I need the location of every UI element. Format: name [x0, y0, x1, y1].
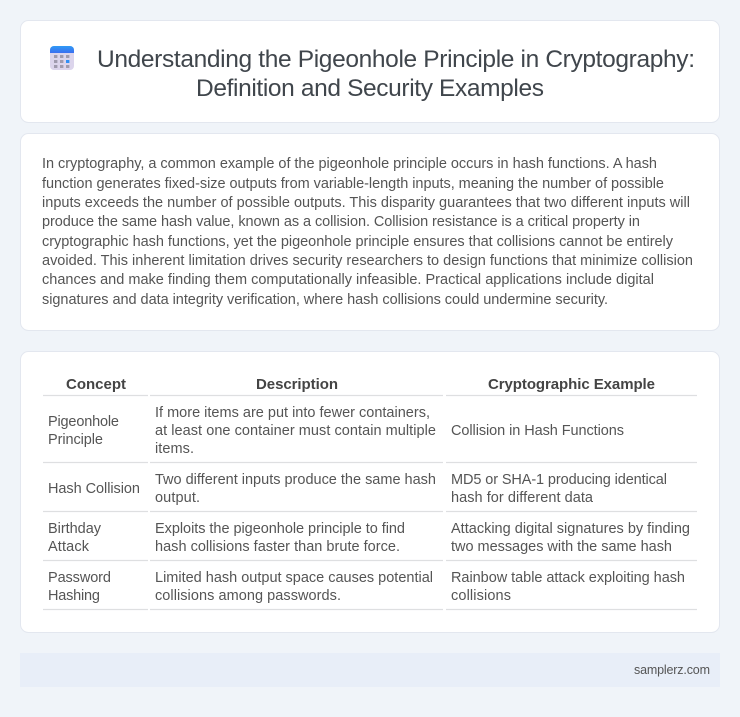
table header row: Cryptographic Example — [488, 376, 655, 393]
table row: hash collision: hash for different data — [451, 490, 594, 506]
panel: introduction — [20, 134, 720, 330]
panel: title header — [20, 20, 720, 122]
table row: pigeonhole principle — [48, 405, 624, 457]
table row: birthday attack: hash collisions faster than brute force. — [155, 539, 400, 555]
text block: introduction paragraph: produce the same hash value, known as a collision. Collision resistance is a critical property in — [42, 214, 640, 230]
table row: password hashing: collisions among passwords. — [155, 588, 341, 604]
heading — [97, 46, 695, 102]
footer: samplerz.com — [634, 663, 710, 677]
text block: introduction paragraph: In cryptography, a common example of the pigeonhole principle occurs in hash functions. A hash — [42, 156, 657, 172]
heading: Understanding the Pigeonhole Principle in Cryptography: — [97, 46, 695, 73]
table row: pigeonhole principle: Collision in Hash Functions — [451, 423, 624, 439]
heading: Definition and Security Examples — [196, 75, 544, 102]
table row: password hashing: Rainbow table attack exploiting hash — [451, 570, 685, 586]
table row: password hashing: collisions — [451, 588, 511, 604]
table row: pigeonhole principle: Pigeonhole — [48, 414, 119, 430]
text block: introduction paragraph: inputs exceeds the number of possible outputs. This disparity guarantees that two different inputs will — [42, 195, 690, 211]
table row: pigeonhole principle: items. — [155, 441, 194, 457]
table header row — [66, 376, 655, 393]
table row: hash collision: Hash Collision — [48, 481, 140, 497]
table row: password hashing: Password — [48, 570, 111, 586]
table row: hash collision: MD5 or SHA-1 producing identical — [451, 472, 667, 488]
table row: password hashing: Hashing — [48, 588, 100, 604]
text block: introduction paragraph: avoided. This inherent limitation drives security researchers to design functions that minimize collision — [42, 253, 693, 269]
table row: hash collision: output. — [155, 490, 200, 506]
table row: birthday attack: Exploits the pigeonhole principle to find — [155, 521, 405, 537]
table row: pigeonhole principle: If more items are put into fewer containers, — [155, 405, 430, 421]
table row: pigeonhole principle: Principle — [48, 432, 103, 448]
table row: password hashing — [48, 570, 685, 604]
text block: introduction paragraph: function generates fixed-size outputs from variable-length inputs, meaning the number of possible — [42, 176, 664, 192]
table row: hash collision — [48, 472, 667, 506]
text block: introduction paragraph: chances and make finding them computationally infeasible. Practical applications include digital — [42, 272, 654, 288]
text block: introduction paragraph: cryptographic hash functions, yet the pigeonhole principle ensures that collisions cannot be entirely — [42, 234, 674, 250]
icon: calendar — [50, 46, 74, 70]
text block: introduction paragraph — [42, 156, 693, 308]
table row: birthday attack: Attack — [48, 539, 90, 555]
table header row: Concept — [66, 376, 126, 393]
table row: birthday attack: two messages with the same hash — [451, 539, 672, 555]
table row: pigeonhole principle: at least one container must contain multiple — [155, 423, 436, 439]
table row: password hashing: Limited hash output space causes potential — [155, 570, 433, 586]
footer — [20, 653, 720, 687]
table row: birthday attack: Birthday — [48, 521, 102, 537]
panel: concept table — [20, 352, 720, 632]
table row: birthday attack — [48, 521, 690, 555]
table header row: Description — [256, 376, 338, 393]
text block: introduction paragraph: signatures and data integrity verification, where hash collisions could undermine security. — [42, 292, 608, 308]
table row: birthday attack: Attacking digital signatures by finding — [451, 521, 690, 537]
table row: hash collision: Two different inputs produce the same hash — [155, 472, 436, 488]
